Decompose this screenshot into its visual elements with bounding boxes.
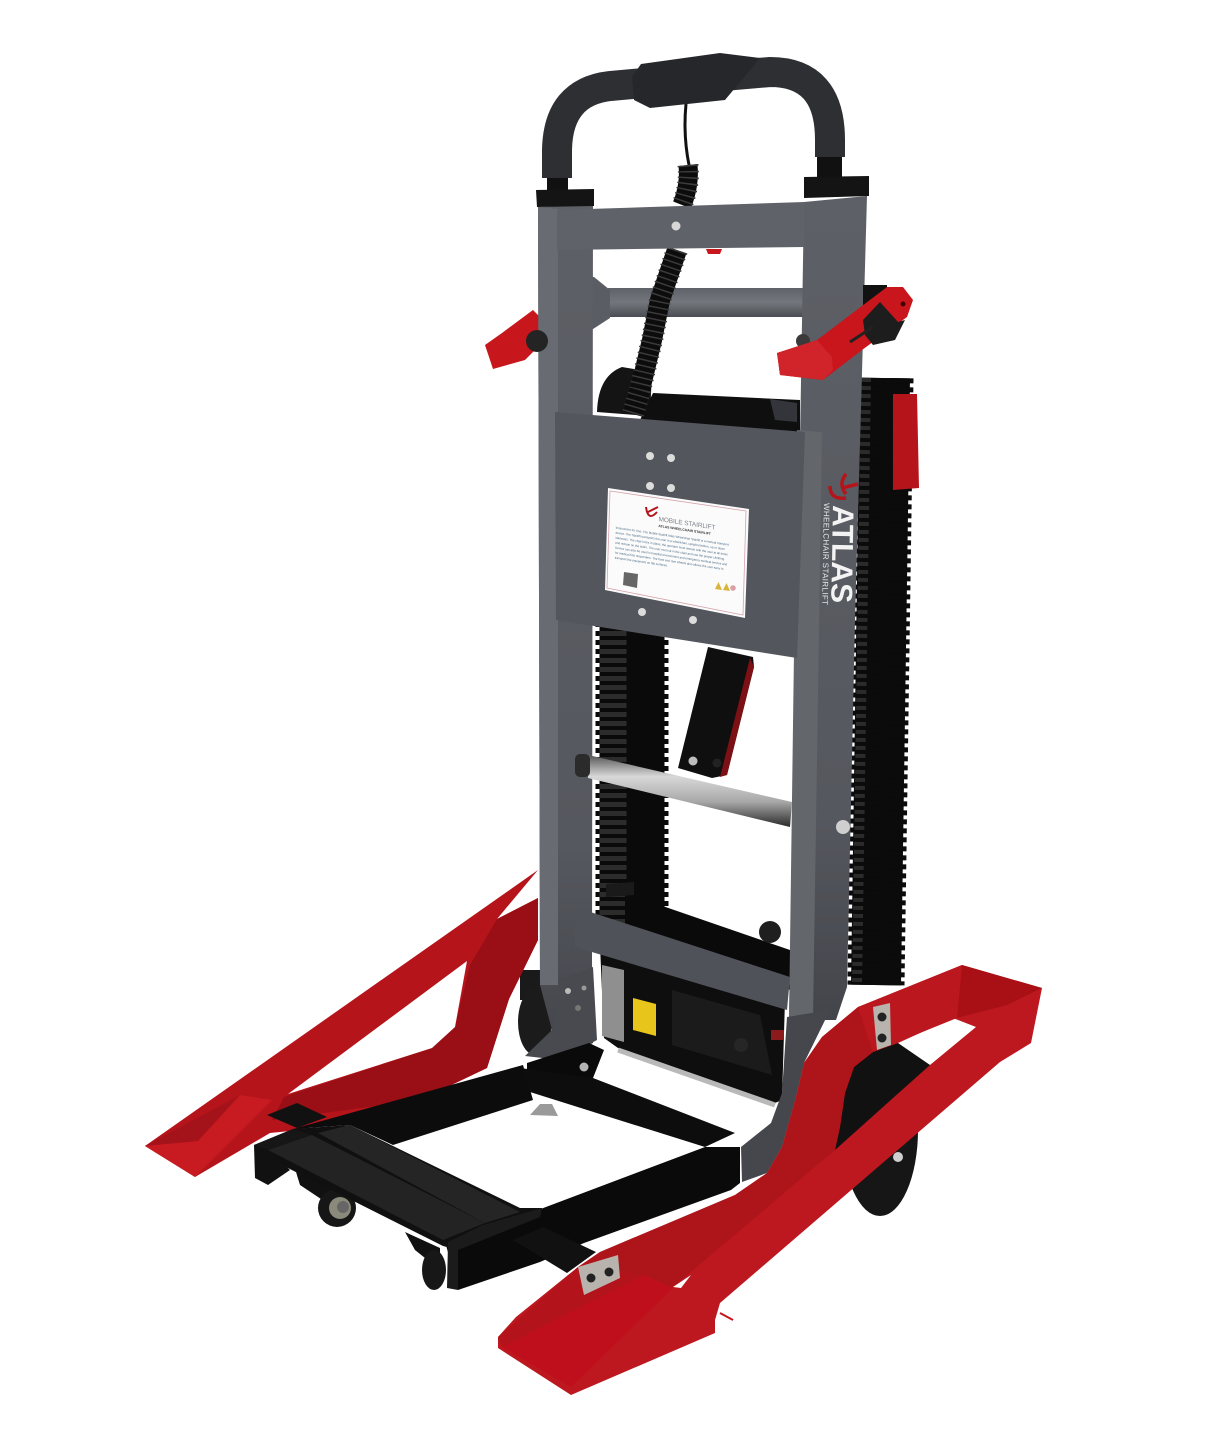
plate top front [268, 1135, 485, 1240]
handle grip [547, 53, 842, 190]
right post foot [741, 1010, 830, 1182]
label barcode [623, 572, 638, 588]
brake foot [530, 1104, 558, 1116]
left post [538, 205, 593, 1060]
motor assembly [600, 882, 790, 1105]
left rear wheel [518, 970, 552, 1055]
base frame [254, 1043, 740, 1290]
dark opening [835, 1043, 930, 1150]
top crossbar [557, 202, 804, 254]
gray crossbar rod behind frame [578, 277, 806, 331]
label subtitle: ATLAS WHEELCHAIR STAIRLIFT [658, 524, 712, 536]
white opening [898, 1018, 976, 1065]
wheelchair stairlift words: WHEELCHAIR STAIRLIFT [820, 503, 831, 605]
label instructions: Instructions for Use: The Mobile Stairlift Atlas Wheelchair Stairlift is a manual transport [616, 526, 729, 547]
plate backing [254, 1125, 542, 1250]
left red fork [145, 870, 538, 1177]
steel plate top right with bolts [873, 1003, 891, 1050]
strut to right fork [513, 1227, 596, 1273]
folding handle bar [678, 647, 754, 778]
adjustment knobs [606, 882, 634, 897]
right post [789, 196, 867, 1020]
logo mark [830, 474, 858, 498]
central panel [555, 412, 805, 658]
right corner block [447, 1208, 542, 1290]
front casters [296, 1172, 345, 1205]
instruction label [605, 488, 749, 618]
label warning icons [715, 582, 730, 591]
lower crossbar [575, 907, 790, 1010]
label instructions: and remain on the stairs. The user must sit in the chair and use the proper climbing. [615, 541, 725, 561]
left stub of plate [254, 1145, 290, 1185]
steel plate bottom with bolts [578, 1255, 620, 1295]
small white gap [673, 1275, 691, 1288]
S band shading [578, 1007, 873, 1288]
coiled cable [633, 104, 689, 414]
label instructions: Device can also be used in hospital environment and emergency medical service and [615, 546, 727, 567]
strut to left fork [267, 1103, 327, 1128]
bolt on right post [836, 820, 850, 834]
post lettering: Atlas Wheelchair Stairlift [820, 474, 859, 605]
label instructions: device. The Stairlift transports the user in a wheelchair, upright position, up or down [615, 531, 725, 551]
chrome rod [575, 754, 792, 827]
rear casting with bolt [527, 1043, 604, 1078]
upper scoop interior [957, 965, 1042, 1018]
right rail [446, 1147, 740, 1290]
left handle knob [526, 330, 548, 352]
left foot bracket [525, 967, 597, 1060]
label instructions: transport the equipment on flat surfaces. [615, 556, 668, 568]
plate top rear [318, 1125, 520, 1223]
left rail [293, 1065, 533, 1145]
label title: MOBILE STAIRLIFT [659, 516, 716, 532]
label instructions: stairways. The chair locks in place; the operator must remain with the user at all times [615, 536, 728, 557]
rear rail [520, 1068, 735, 1147]
rear black drive tracks [597, 367, 885, 985]
right rear wheel and bracket [842, 1044, 925, 1216]
small red tick [720, 1313, 733, 1320]
right red locking handle [777, 285, 913, 380]
red track bracket [893, 394, 919, 490]
left red locking handle body [485, 310, 540, 369]
label instructions: for medical first responders. The front end rear wheels also allows the user easy to [615, 551, 724, 571]
front rim of plate [254, 1129, 312, 1150]
right fork openings and shading [498, 965, 1042, 1387]
atlas word: ATLAS [824, 505, 859, 603]
lower scoop interior [502, 1275, 673, 1387]
frame caps [536, 176, 869, 207]
label logo [646, 507, 658, 516]
right red fork [498, 965, 1042, 1395]
